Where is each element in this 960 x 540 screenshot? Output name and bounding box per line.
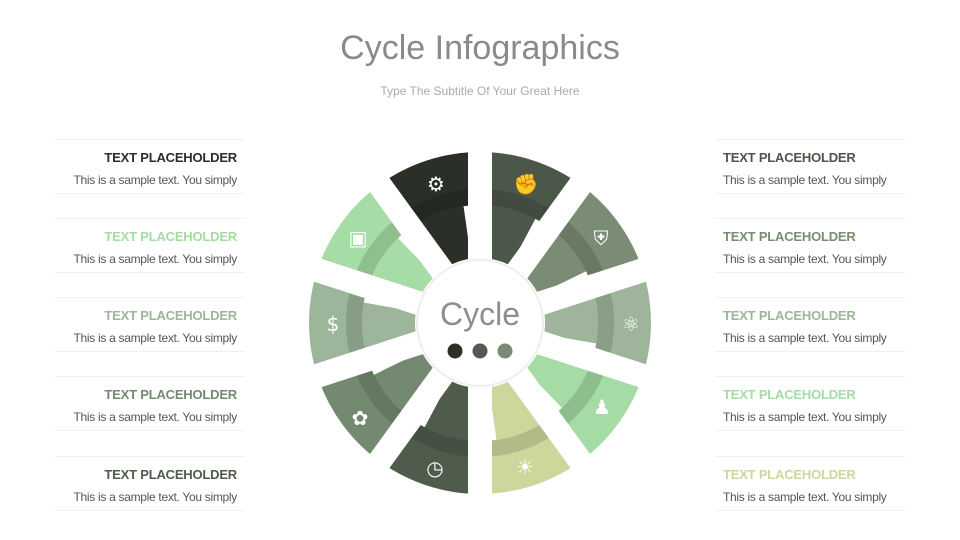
left row 1: This is a sample text. You simply — [73, 173, 237, 187]
segment 1 — [480, 152, 580, 266]
right row 2: TEXT PLACEHOLDER — [723, 229, 856, 244]
left row 4 — [55, 376, 245, 431]
left row 5 — [55, 456, 245, 511]
left row 1 — [55, 139, 245, 194]
left row 2: TEXT PLACEHOLDER — [104, 229, 237, 244]
right row 4: TEXT PLACEHOLDER — [723, 387, 856, 402]
right row 3: This is a sample text. You simply — [723, 331, 887, 345]
segment 8 — [286, 245, 425, 376]
right row 4: This is a sample text. You simply — [723, 410, 887, 424]
icon: location money: $ — [327, 312, 339, 336]
segment 2 — [514, 185, 662, 336]
icon: clock: ◷ — [426, 456, 444, 480]
segment 9 — [317, 175, 456, 305]
icon: atom: ⚛ — [622, 312, 640, 336]
right row 5 — [715, 456, 905, 511]
icon: gear user: ⚙ — [427, 172, 445, 196]
right row 4 — [715, 376, 905, 431]
center circle: Cycle — [440, 296, 520, 332]
segment 5 — [432, 369, 581, 520]
icons — [327, 172, 640, 480]
icon: shield user: ⛨ — [594, 226, 608, 250]
segment 7 — [298, 310, 446, 461]
left row 2: This is a sample text. You simply — [73, 252, 237, 266]
subtitle: Type The Subtitle Of Your Great Here — [380, 84, 580, 98]
right row 2 — [715, 218, 905, 273]
left row 5: TEXT PLACEHOLDER — [104, 467, 237, 482]
right row 1: TEXT PLACEHOLDER — [723, 150, 856, 165]
center circle — [417, 260, 543, 386]
left row 3 — [55, 297, 245, 352]
left row 3: TEXT PLACEHOLDER — [104, 308, 237, 323]
right row 1 — [715, 139, 905, 194]
right row 2: This is a sample text. You simply — [723, 252, 887, 266]
left row 4: This is a sample text. You simply — [73, 410, 237, 424]
left row 2 — [55, 218, 245, 273]
title: Cycle Infographics — [340, 29, 620, 67]
right row 1: This is a sample text. You simply — [723, 173, 887, 187]
icon: brain: ✿ — [352, 406, 368, 430]
left row 1: TEXT PLACEHOLDER — [104, 150, 237, 165]
icon: camera: ▣ — [349, 226, 367, 250]
right row 5: TEXT PLACEHOLDER — [723, 467, 856, 482]
left row 5: This is a sample text. You simply — [73, 490, 237, 504]
segment 10 — [379, 126, 528, 277]
icon: presenter: ♟ — [593, 395, 611, 419]
right row 3: TEXT PLACEHOLDER — [723, 308, 856, 323]
segment 6 — [380, 380, 480, 494]
segment 3 — [535, 270, 674, 401]
icon: idea head: ✊ — [514, 172, 538, 196]
left row 4: TEXT PLACEHOLDER — [104, 387, 237, 402]
left row 3: This is a sample text. You simply — [73, 331, 237, 345]
icon: bulb: ☀ — [516, 455, 534, 479]
segment 4 — [504, 341, 643, 471]
right row 3 — [715, 297, 905, 352]
right row 5: This is a sample text. You simply — [723, 490, 887, 504]
